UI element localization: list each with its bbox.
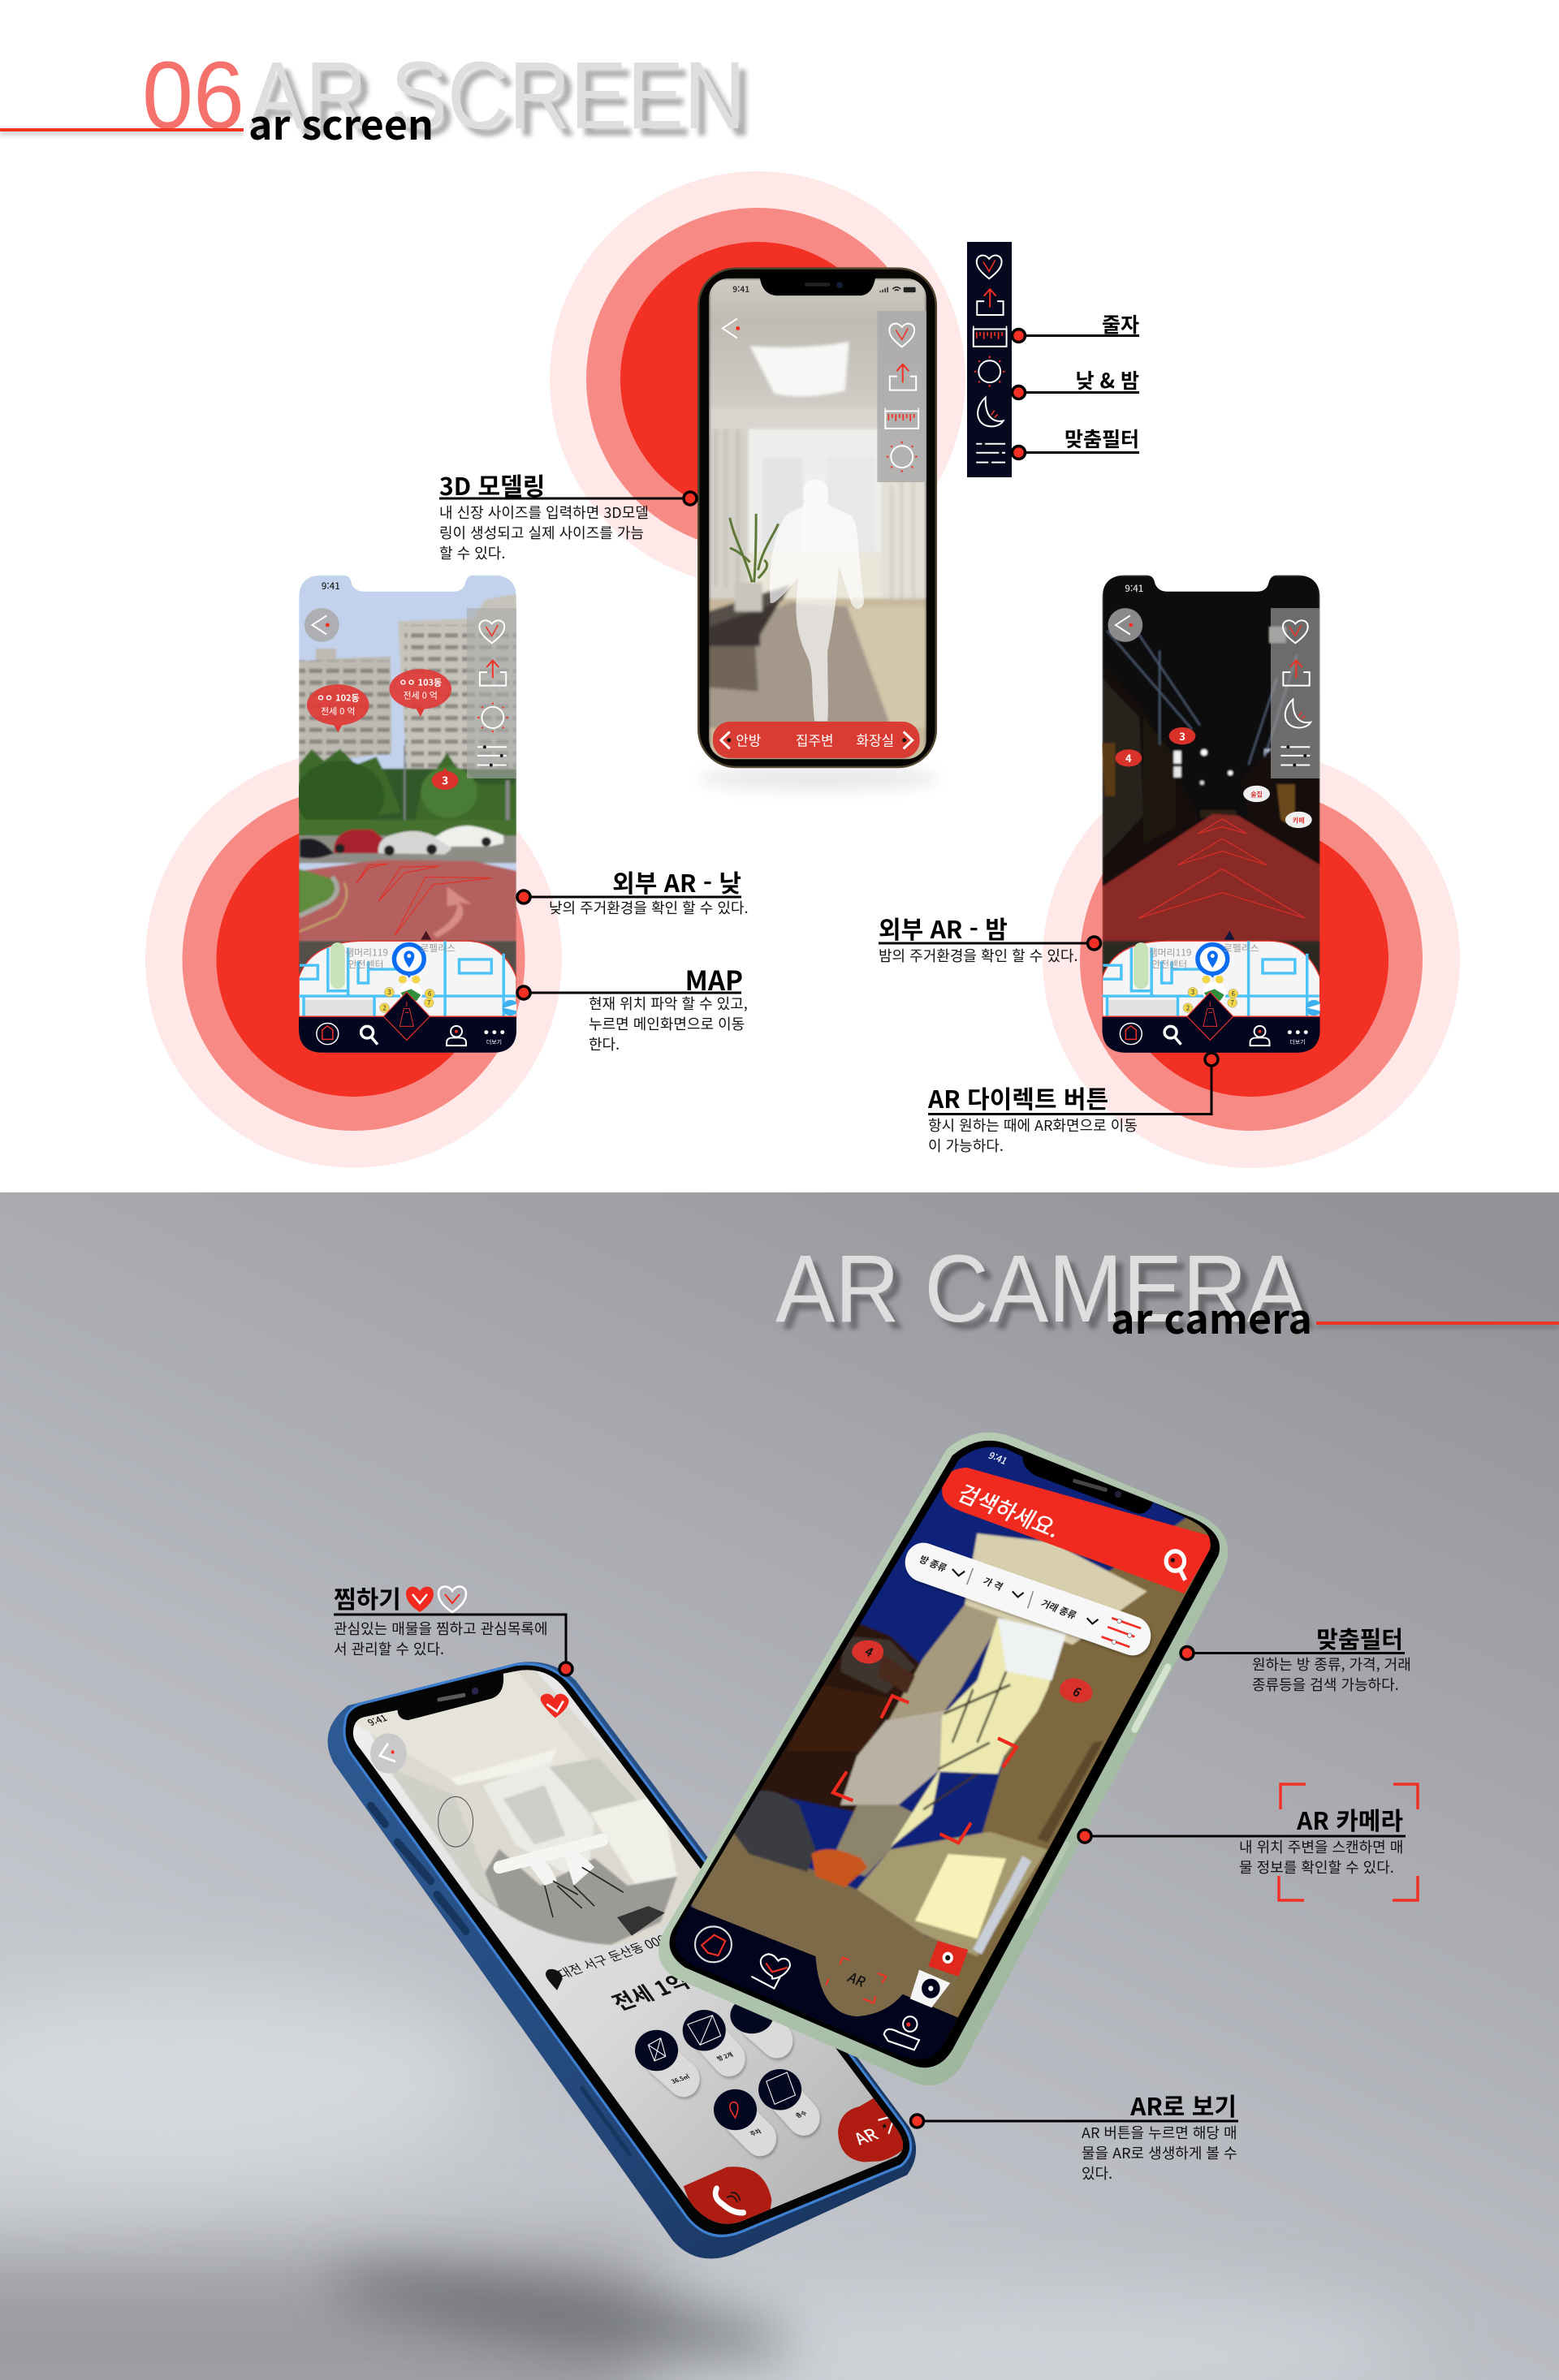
screen texts: 대전 서구 둔산동 00아 <box>554 1929 675 1982</box>
concentric circles: top <box>550 171 965 587</box>
status bar: 9:41 <box>322 580 340 593</box>
icon: sliders <box>976 442 1005 464</box>
heading: AR CAMERA <box>775 1235 1559 1346</box>
callout: outdoor AR day: 낮의 주거환경을 확인 할 수 있다. <box>549 897 749 918</box>
screen texts: 9:41 <box>365 1712 390 1729</box>
callout: AR camera <box>1078 1784 1418 1900</box>
panel: AR screen section background <box>0 0 1559 1192</box>
concentric circles: left <box>145 752 562 1167</box>
map labels <box>1149 941 1306 1046</box>
status bar: 9:41 <box>1125 582 1143 595</box>
map labels: 3 <box>387 988 391 997</box>
bubble: bar <box>1243 786 1270 802</box>
screen texts: 4 <box>862 1643 877 1661</box>
callout: MAP: 한다. <box>589 1033 620 1054</box>
callout: favourite: 찜하기 <box>334 1580 401 1615</box>
callout: custom filter: 맞춤필터 <box>1316 1621 1403 1655</box>
icon: camera brackets <box>1279 1784 1418 1900</box>
icon: sun <box>974 356 1005 387</box>
screen texts: 층수 <box>793 2109 810 2120</box>
red heading rule <box>0 128 244 132</box>
concentric circles: right <box>1043 751 1460 1168</box>
icon: outline heart <box>438 1587 466 1612</box>
screen texts: AR <box>848 2122 883 2150</box>
callout: favourite: 서 관리할 수 있다. <box>334 1638 444 1659</box>
map labels: 더보기 <box>486 1037 502 1046</box>
callout: AR camera: 물 정보를 확인할 수 있다. <box>1239 1856 1394 1878</box>
screen texts: 9:41 <box>986 1449 1010 1468</box>
callout: MAP <box>517 959 748 1054</box>
callout: AR direct button <box>927 1053 1218 1156</box>
AR bubble 3: 3 <box>1179 728 1185 744</box>
callout: custom filter: 맞춤필터 <box>1065 424 1139 453</box>
map labels: 3 <box>1191 988 1194 997</box>
AR bubble 3: 3 <box>442 771 448 787</box>
AR bubble 4 <box>1115 749 1142 766</box>
callout: AR direct button: AR 다이렉트 버튼 <box>927 1080 1108 1115</box>
phone: interior 3D modelling <box>697 267 940 791</box>
watermark title AR SCREEN: AR SCREEN <box>248 42 745 149</box>
AR bubble 4: 4 <box>1125 750 1132 765</box>
watermark title AR CAMERA: AR CAMERA <box>775 1235 1306 1343</box>
callout: 3D modelling: 링이 생성되고 실제 사이즈를 가늠 <box>439 522 644 543</box>
AR bubble 102: 전세 0 억 <box>321 705 355 718</box>
map labels: 로펠리스 <box>1224 941 1259 955</box>
AR bubble 103: 전세 0 억 <box>404 689 438 702</box>
map labels: 7 <box>1230 998 1234 1007</box>
screen texts <box>365 1712 883 2150</box>
callout: 3D modelling: 할 수 있다. <box>439 542 505 563</box>
map labels: 6 <box>1231 990 1236 998</box>
callout: custom filter <box>1012 424 1139 459</box>
callout: view in AR: 물을 AR로 생생하게 볼 수 <box>1082 2142 1237 2163</box>
phone: interior 3D modelling: 화장실 <box>857 729 894 749</box>
callout: view in AR <box>911 2087 1238 2184</box>
phone: blue mockup property detail <box>328 1658 922 2259</box>
callout: day and night <box>1012 365 1139 399</box>
icon strip: toolbar legend <box>967 242 1012 477</box>
screen texts: AR <box>844 1967 870 1991</box>
phone: interior 3D modelling: 집주변 <box>796 729 834 749</box>
screen texts: 방 2개 <box>715 2050 736 2063</box>
map labels: 2 <box>1186 1004 1190 1012</box>
callout: 3D modelling: 3D 모델링 <box>439 467 545 502</box>
map labels: 6 <box>428 990 432 998</box>
callout: MAP: MAP <box>685 959 743 998</box>
AR bubble 3 <box>432 768 459 790</box>
icon: moon <box>978 398 1004 426</box>
callout: AR camera: 내 위치 주변을 스캔하면 매 <box>1239 1836 1403 1857</box>
subtitle ar camera: ar camera <box>1111 1287 1312 1346</box>
callout: custom filter: 종류등을 검색 가능하다. <box>1252 1674 1399 1695</box>
screen texts: 거래 종류 <box>1039 1597 1079 1622</box>
bubble: cafe: 카페 <box>1293 816 1305 825</box>
red heading rule <box>1316 1322 1559 1325</box>
callout: custom filter <box>1181 1621 1411 1695</box>
bubble: cafe <box>1285 812 1312 828</box>
phone: outdoor AR night <box>1101 575 1322 1053</box>
callout: day and night: 낮 & 밤 <box>1075 365 1139 395</box>
callout: view in AR: AR 버튼을 누르면 해당 매 <box>1082 2122 1237 2143</box>
icon: share <box>977 289 1004 315</box>
callout: outdoor AR day <box>517 864 749 918</box>
callout: outdoor AR night: 외부 AR - 밤 <box>879 910 1008 946</box>
map labels: 2 <box>382 1004 387 1012</box>
icon: ruler <box>974 326 1007 347</box>
callout: AR direct button: 이 가능하다. <box>928 1135 1004 1156</box>
callout: outdoor AR night: 밤의 주거환경을 확인 할 수 있다. <box>879 945 1078 966</box>
callout: custom filter: 원하는 방 종류, 가격, 거래 <box>1252 1653 1411 1675</box>
screen texts: 가 격 <box>981 1575 1005 1593</box>
heading: 06 AR SCREEN <box>0 42 745 152</box>
screen texts: 36.5㎡ <box>669 2072 692 2085</box>
AR bubble 102: ㅇㅇ 102동 <box>317 692 360 704</box>
callout: outdoor AR night <box>879 910 1101 966</box>
screen texts: 6 <box>1069 1684 1085 1701</box>
AR bubble 102 <box>307 684 369 732</box>
subtitle ar screen: ar screen <box>248 93 434 152</box>
callout: ruler <box>1012 309 1139 343</box>
map labels: 7 <box>427 998 430 1007</box>
icon: heart <box>977 256 1002 278</box>
callout: favourite: 관심있는 매물을 찜하고 관심목록에 <box>334 1618 548 1639</box>
phone: green mockup AR camera <box>659 1433 1228 2085</box>
callout: MAP: 현재 위치 파악 할 수 있고, <box>589 993 748 1014</box>
map labels: 로펠리스 <box>420 941 456 955</box>
map labels: 안전센터 <box>1151 957 1187 971</box>
AR bubble 3 <box>1169 727 1195 744</box>
screen texts: 주차 <box>748 2127 763 2138</box>
callout: 3D modelling <box>439 467 697 563</box>
phone: interior 3D modelling: 9:41 <box>732 282 749 295</box>
callout: 3D modelling: 내 신장 사이즈를 입력하면 3D모델 <box>439 502 649 523</box>
callout: ruler: 줄자 <box>1102 309 1139 338</box>
bubble: bar: 술집 <box>1250 790 1263 799</box>
screen texts: 방 종류 <box>917 1553 949 1575</box>
section number 06: 06 <box>142 42 244 149</box>
callout: favourite <box>334 1580 572 1675</box>
AR bubble 103: ㅇㅇ 103동 <box>399 676 442 689</box>
screen texts: 전세 1억 <box>604 1965 695 2016</box>
callout: view in AR: 있다. <box>1082 2162 1112 2184</box>
map labels: 안전센터 <box>348 957 384 971</box>
map labels <box>345 941 502 1046</box>
map labels: 샘머리119 <box>345 946 388 959</box>
panel: AR camera section background <box>0 1192 1559 2380</box>
icon: filled heart <box>406 1587 434 1612</box>
phone: interior 3D modelling: 안방 <box>736 729 761 749</box>
phone: outdoor AR day <box>296 575 519 1053</box>
callout: view in AR: AR로 보기 <box>1129 2087 1237 2123</box>
map labels: 샘머리119 <box>1149 946 1191 959</box>
screen texts: 검색하세요. <box>952 1476 1068 1544</box>
AR bubble 103 <box>389 669 451 717</box>
callout: AR camera: AR 카메라 <box>1296 1801 1403 1837</box>
screen texts <box>844 1449 1085 1991</box>
map labels: 더보기 <box>1289 1037 1306 1046</box>
callout: MAP: 누르면 메인화면으로 이동 <box>589 1013 745 1034</box>
callout: AR direct button: 항시 원하는 때에 AR화면으로 이동 <box>928 1115 1138 1136</box>
callout: outdoor AR day: 외부 AR - 낮 <box>612 864 741 899</box>
